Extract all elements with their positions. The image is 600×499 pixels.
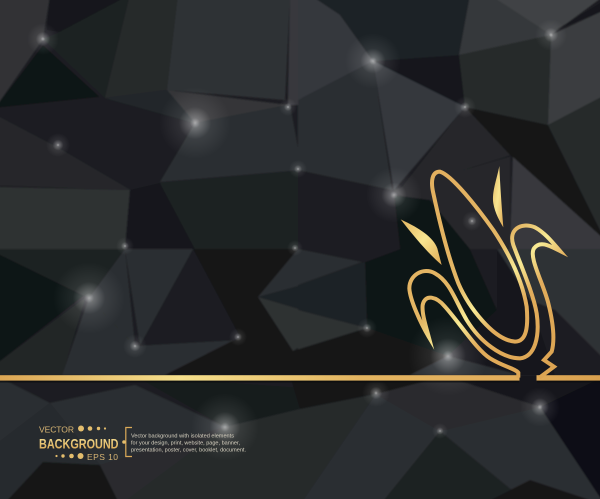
background heading: BACKGROUND [39,436,118,452]
corn husk outline [409,226,560,378]
gold horizon line [0,375,600,382]
bracket [126,428,132,456]
dots row top [78,426,106,432]
eps label: EPS 10 [87,452,118,462]
description: presentation, poster, cover, booklet, document. [131,448,246,454]
vector label: VECTOR [39,424,74,434]
bracket pointer [122,440,126,444]
corn kernel body outline [432,172,527,342]
light glows [27,19,567,461]
dots row bottom [55,453,84,459]
icon: corn cob [401,166,560,378]
top leaf [493,166,503,227]
left leaf [401,219,442,265]
description [131,434,246,454]
description: Vector background with isolated elements [131,434,234,440]
footer logo block [39,424,246,462]
description: for your design, print, website, page, banner, [131,440,240,446]
